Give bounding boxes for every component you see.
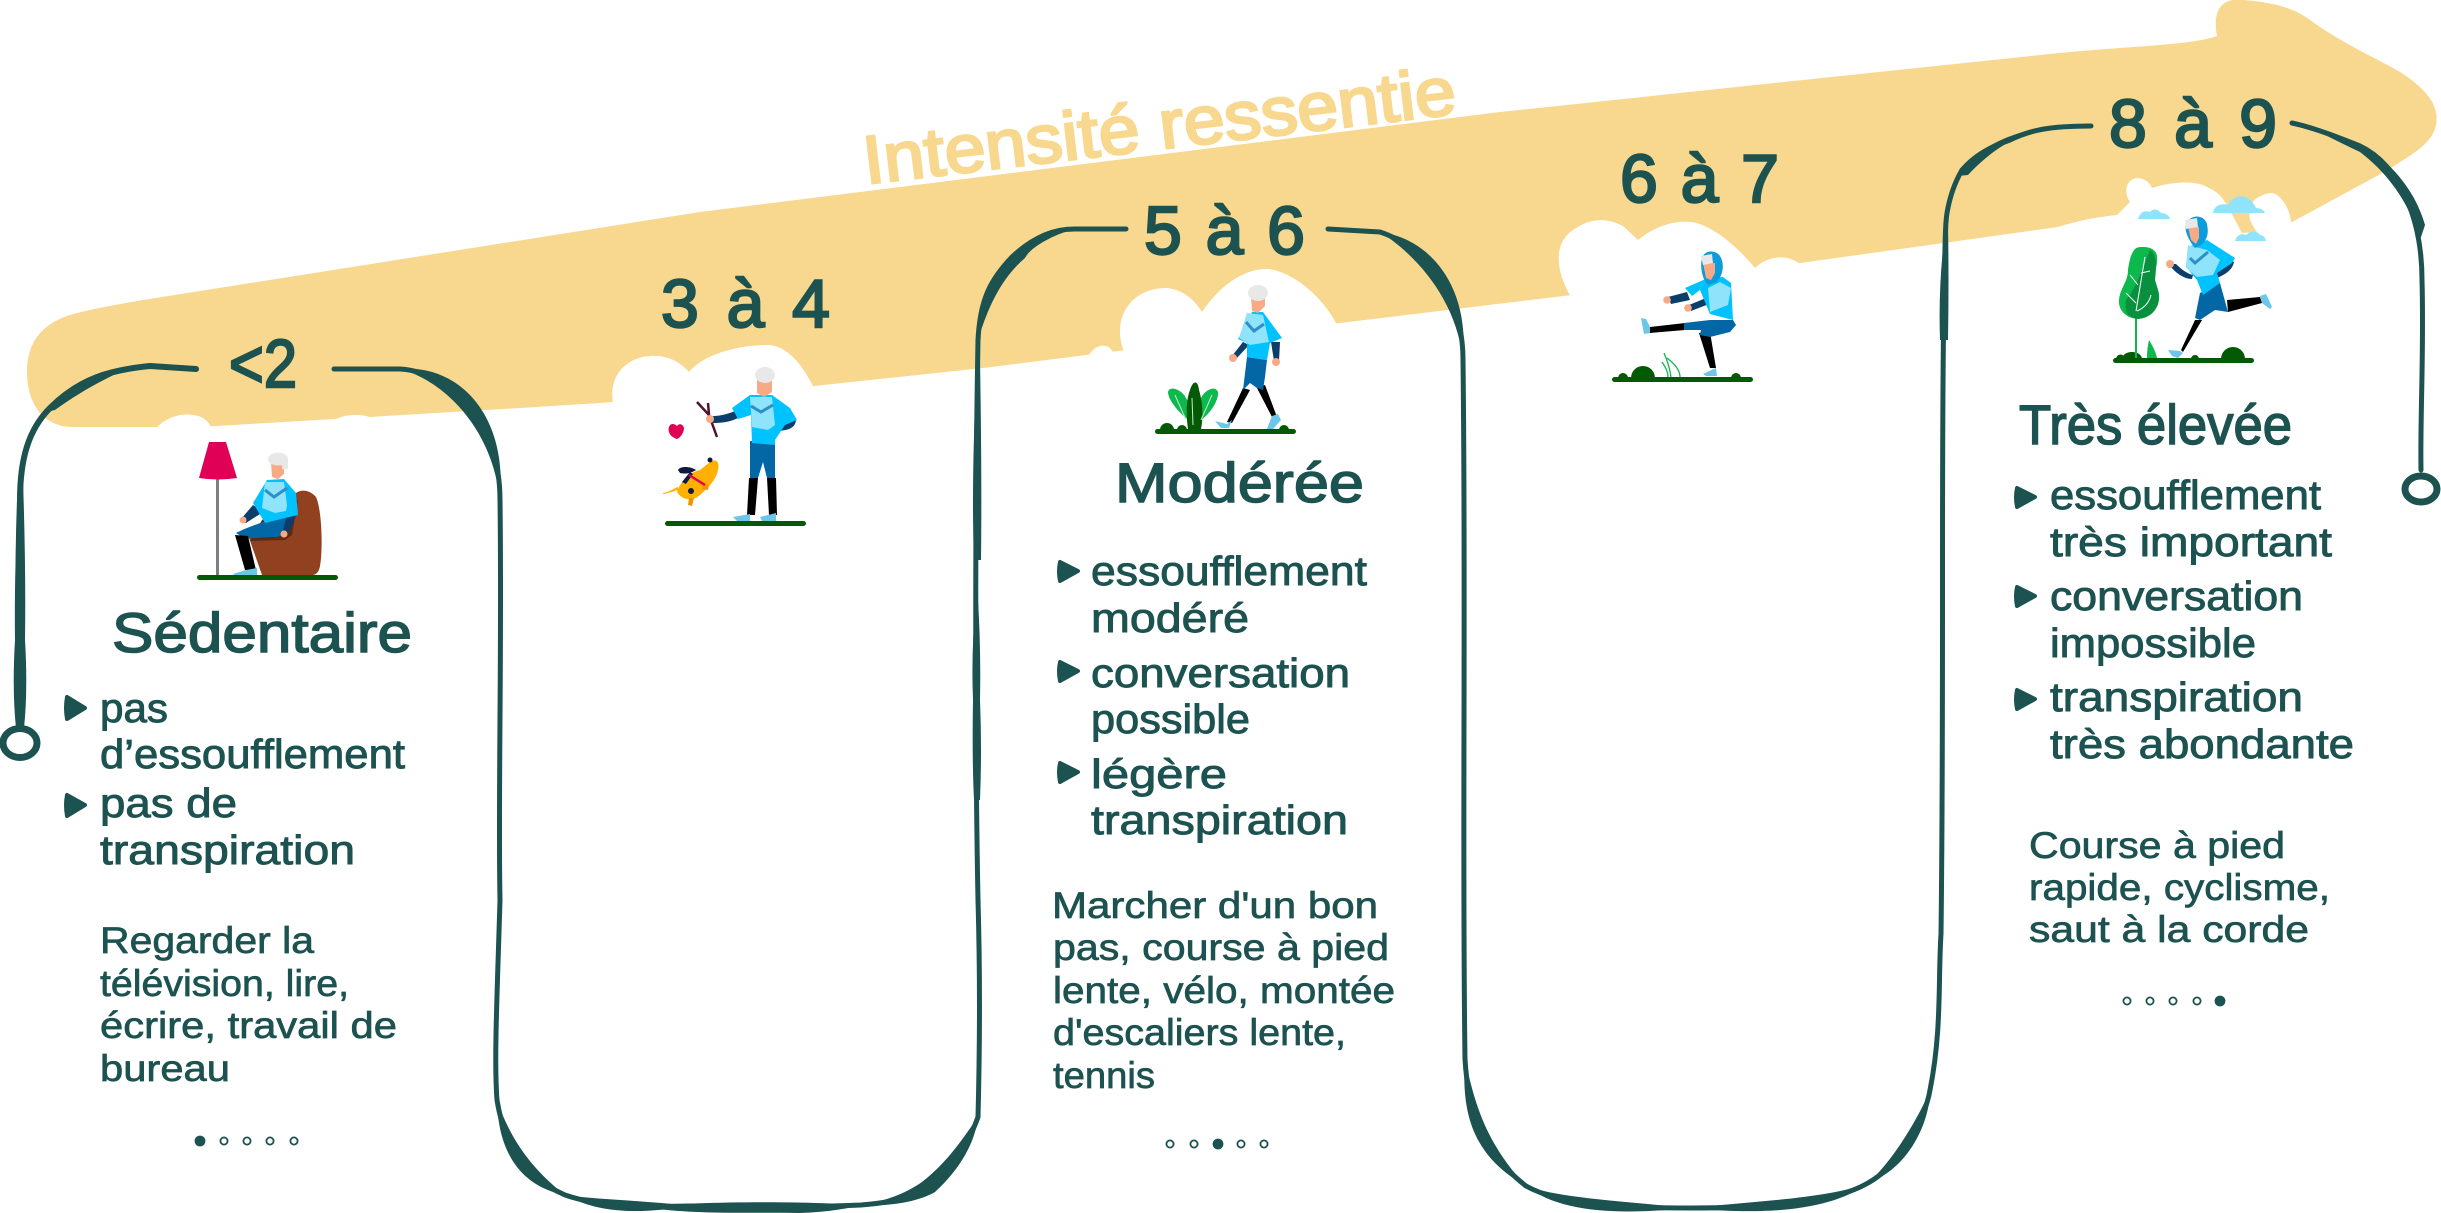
examples text: Course à pied (2029, 825, 2285, 866)
dots: level 3 of 5 (1166, 1140, 1268, 1148)
bullet text: transpiration très abondante: transpiration (2050, 674, 2303, 720)
bullet marker (2016, 587, 2035, 606)
illustration: running person with tree and clouds (2113, 196, 2272, 363)
examples text: saut à la corde (2029, 909, 2309, 950)
bullet marker (2016, 690, 2035, 709)
cloud: 5 à 6 (1120, 269, 1337, 360)
cloud: 6 à 7 (1559, 220, 1800, 300)
bullet list (66, 685, 406, 873)
bullet text: pas de transpiration: pas de (100, 780, 237, 826)
dots: level 5 of 5 (2123, 996, 2224, 1006)
examples text: écrire, travail de (100, 1005, 397, 1046)
examples text: Marcher d'un bon (1052, 885, 1378, 926)
cloud: below band left 2 (328, 415, 375, 424)
examples text: télévision, lire, (100, 963, 349, 1004)
score: 8 à 9: 8 à 9 (2109, 86, 2277, 162)
examples text: d'escaliers lente, (1053, 1012, 1346, 1053)
bullet marker (1059, 662, 1078, 681)
examples text: rapide, cyclisme, (2029, 867, 2330, 908)
bullet marker (66, 697, 85, 719)
illustration: walking person with plant (1155, 285, 1296, 434)
cloud: 3 à 4 (612, 345, 814, 420)
panel: Sédentaire (3, 326, 412, 1146)
illustration: person with dog and stick (663, 367, 806, 526)
bullet marker (1059, 763, 1078, 782)
bullet text: pas d'essoufflement: pas (100, 685, 168, 731)
examples text: bureau (100, 1048, 230, 1089)
heading: Très élevée: Très élevée (2019, 393, 2292, 456)
panel: Modérée (1052, 193, 1395, 1148)
bullet text: conversation possible: conversation (1091, 650, 1350, 696)
bullet list (1059, 548, 1368, 843)
panel: Très élevée (2016, 86, 2437, 1006)
frame outline: fifth card right side to end ring (2292, 123, 2437, 502)
arrow band shape (27, 0, 2437, 427)
bullet marker (66, 795, 85, 816)
bullet text: conversation impossible: conversation (2050, 573, 2303, 619)
frame outline: first card right, U-bend under second card, third card top (334, 229, 1126, 1213)
illustration: person kicking leg forward (1612, 252, 1753, 382)
bullet text: pas de transpiration: transpiration (100, 827, 355, 873)
examples text: lente, vélo, montée (1053, 970, 1395, 1011)
cloud: below band left 1 (155, 415, 212, 430)
score: <2: <2 (229, 326, 297, 402)
illustration: seated person with lamp (197, 442, 338, 580)
examples text: pas, course à pied (1053, 927, 1389, 968)
bullet marker (1059, 562, 1078, 581)
bullet text: essoufflement très important: très important (2050, 519, 2333, 565)
dots: level 1 of 5 (196, 1136, 298, 1146)
heading: Modérée: Modérée (1115, 451, 1364, 514)
bullet text: essoufflement modéré: essoufflement (1091, 548, 1368, 594)
score: 6 à 7: 6 à 7 (1620, 141, 1779, 217)
frame outline: third card right, U-bend under fourth card, fifth card top (1328, 126, 2091, 1211)
background clouds (155, 178, 2291, 430)
bullet text: conversation impossible: impossible (2050, 620, 2256, 666)
score: 5 à 6: 5 à 6 (1144, 193, 1305, 269)
cloud: 5 à 6 small (1088, 346, 1116, 357)
bullet marker (2016, 488, 2035, 507)
title: Intensité ressentie: Intensité ressentie (859, 53, 1460, 199)
bullet text: essoufflement modéré: modéré (1091, 595, 1249, 641)
examples text: tennis (1053, 1055, 1155, 1096)
score: 3 à 4: 3 à 4 (661, 266, 830, 342)
examples text: Regarder la (100, 920, 314, 961)
bullet list (2016, 472, 2354, 767)
heading: Sédentaire: Sédentaire (112, 601, 412, 664)
bullet text: conversation possible: possible (1091, 696, 1250, 742)
frame outline: ring start to top of first card (3, 366, 196, 758)
panel: 3 à 4 (661, 266, 830, 526)
bullet text: légère transpiration: transpiration (1091, 797, 1348, 843)
bullet text: pas d'essoufflement: d’essoufflement (100, 731, 406, 777)
bullet text: légère transpiration: légère (1091, 751, 1227, 797)
cloud: 8 à 9 (2058, 178, 2291, 245)
panel: 6 à 7 (1612, 141, 1779, 382)
bullet text: essoufflement très important: essoufflement (2050, 472, 2322, 518)
bullet text: transpiration très abondante: très abondante (2050, 721, 2354, 767)
